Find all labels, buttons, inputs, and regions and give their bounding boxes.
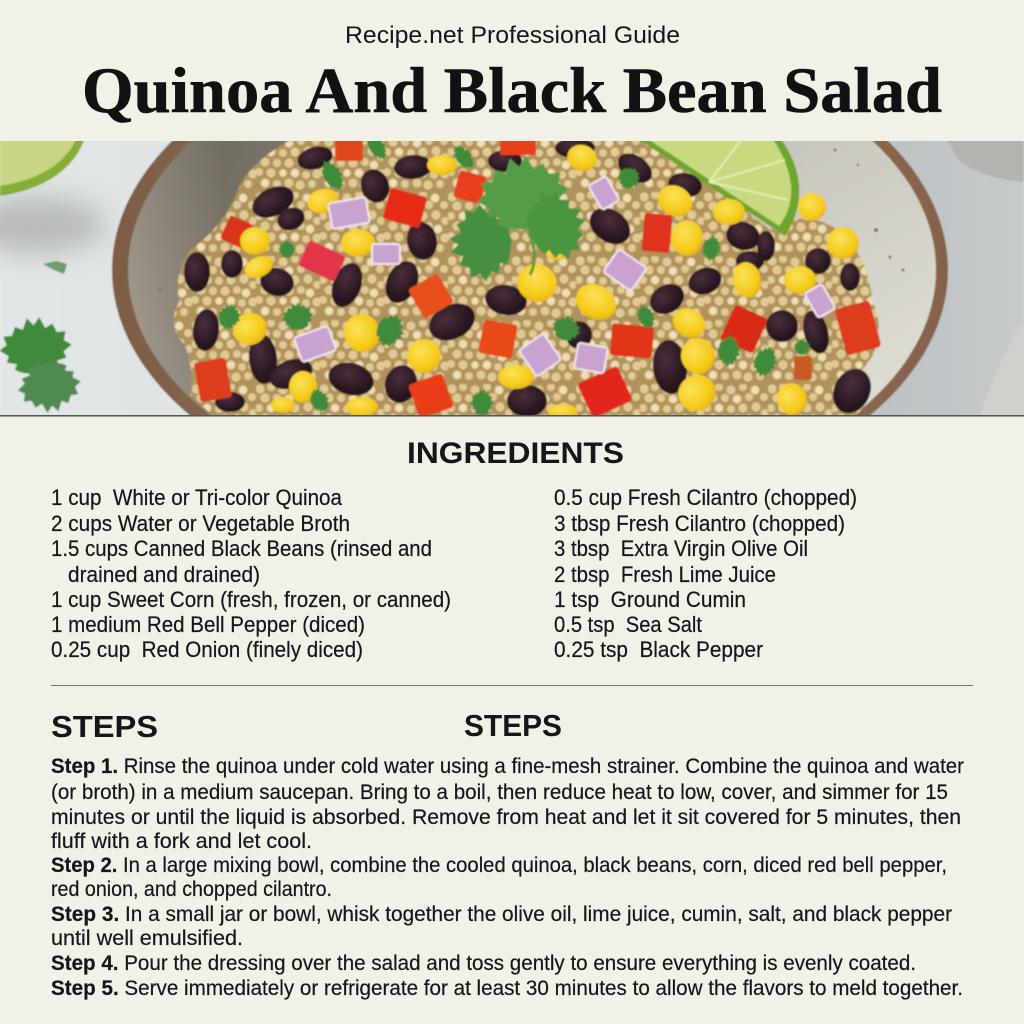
steps text: Step 2. In a large mixing bowl, combine the cooled quinoa, black beans, corn, diced red bell pepper, (51, 853, 947, 877)
lime wedge in bowl (632, 135, 799, 236)
ingredients heading: INGREDIENTS (407, 437, 624, 470)
hero photo: quinoa salad bowl (0, 141, 1024, 415)
small cilantro pieces (214, 128, 811, 416)
steps heading left: STEPS (51, 709, 158, 744)
steps heading center: STEPS (464, 708, 562, 743)
ingredients right column: 1 tsp Ground Cumin (554, 587, 746, 612)
title: Quinoa And Black Bean Salad (82, 55, 942, 127)
lime half top left (0, 135, 86, 196)
ingredients left column (51, 485, 451, 662)
ingredients left column: 0.25 cup Red Onion (finely diced) (51, 637, 363, 662)
plate at top right (948, 141, 1024, 182)
ingredients left column: 1.5 cups Canned Black Beans (rinsed and (51, 536, 432, 561)
ingredients left column: 1 medium Red Bell Pepper (diced) (51, 612, 365, 637)
photo bottom border (0, 415, 1024, 416)
cilantro on table (0, 315, 85, 417)
ingredients right column: 2 tbsp Fresh Lime Juice (554, 562, 776, 587)
linen cloth (980, 320, 1024, 415)
red peppers (194, 135, 882, 419)
steps text (51, 754, 964, 1000)
ingredients right column: 3 tbsp Extra Virgin Olive Oil (554, 536, 808, 561)
steps section (51, 708, 964, 1000)
steps text: Step 3. In a small jar or bowl, whisk together the olive oil, lime juice, cumin, salt, and black pepper (51, 902, 952, 926)
ingredients left column: 2 cups Water or Vegetable Broth (51, 511, 350, 536)
steps text: Step 1. Rinse the quinoa under cold water using a fine-mesh strainer. Combine the quinoa and water (51, 754, 964, 778)
ingredients right column (554, 485, 857, 662)
large cilantro garnish (449, 156, 586, 282)
subtitle: Recipe.net Professional Guide (345, 22, 680, 49)
ingredients right column: 0.25 tsp Black Pepper (554, 637, 763, 662)
ingredients left column: 1 cup White or Tri-color Quinoa (51, 485, 342, 510)
photo contents (0, 141, 1024, 415)
shadow under lime (0, 197, 105, 253)
red onion pieces (294, 176, 836, 377)
ingredients left column: 1 cup Sweet Corn (fresh, frozen, or canned) (51, 587, 451, 612)
bowl speckles (158, 148, 904, 292)
steps text: fluff with a fork and let cool. (51, 829, 312, 853)
ingredients right column: 0.5 tsp Sea Salt (554, 612, 703, 637)
steps text: (or broth) in a medium saucepan. Bring to a boil, then reduce heat to low, cover, and simmer for 15 (51, 780, 948, 804)
steps text: red onion, and chopped cilantro. (51, 877, 332, 901)
steps text: minutes or until the liquid is absorbed. Remove from heat and let it sit covered for 5 minutes, then (51, 805, 961, 829)
corn kernels (229, 141, 859, 420)
steps text: Step 5. Serve immediately or refrigerate for at least 30 minutes to allow the flavors to meld together. (51, 976, 963, 1000)
steps text: Step 4. Pour the dressing over the salad and toss gently to ensure everything is evenly coated. (51, 951, 916, 975)
quinoa mound (174, 135, 879, 422)
header (82, 22, 942, 127)
ingredients right column: 0.5 cup Fresh Cilantro (chopped) (554, 485, 857, 510)
ingredients right column: 3 tbsp Fresh Cilantro (chopped) (554, 511, 845, 536)
small leaf on table (43, 261, 67, 274)
ingredients section (51, 437, 857, 662)
black beans (184, 138, 878, 419)
steps text: until well emulsified. (51, 926, 243, 950)
bowl (111, 141, 949, 415)
ingredients left column: drained and drained) (68, 562, 260, 587)
table surface (0, 135, 1024, 425)
